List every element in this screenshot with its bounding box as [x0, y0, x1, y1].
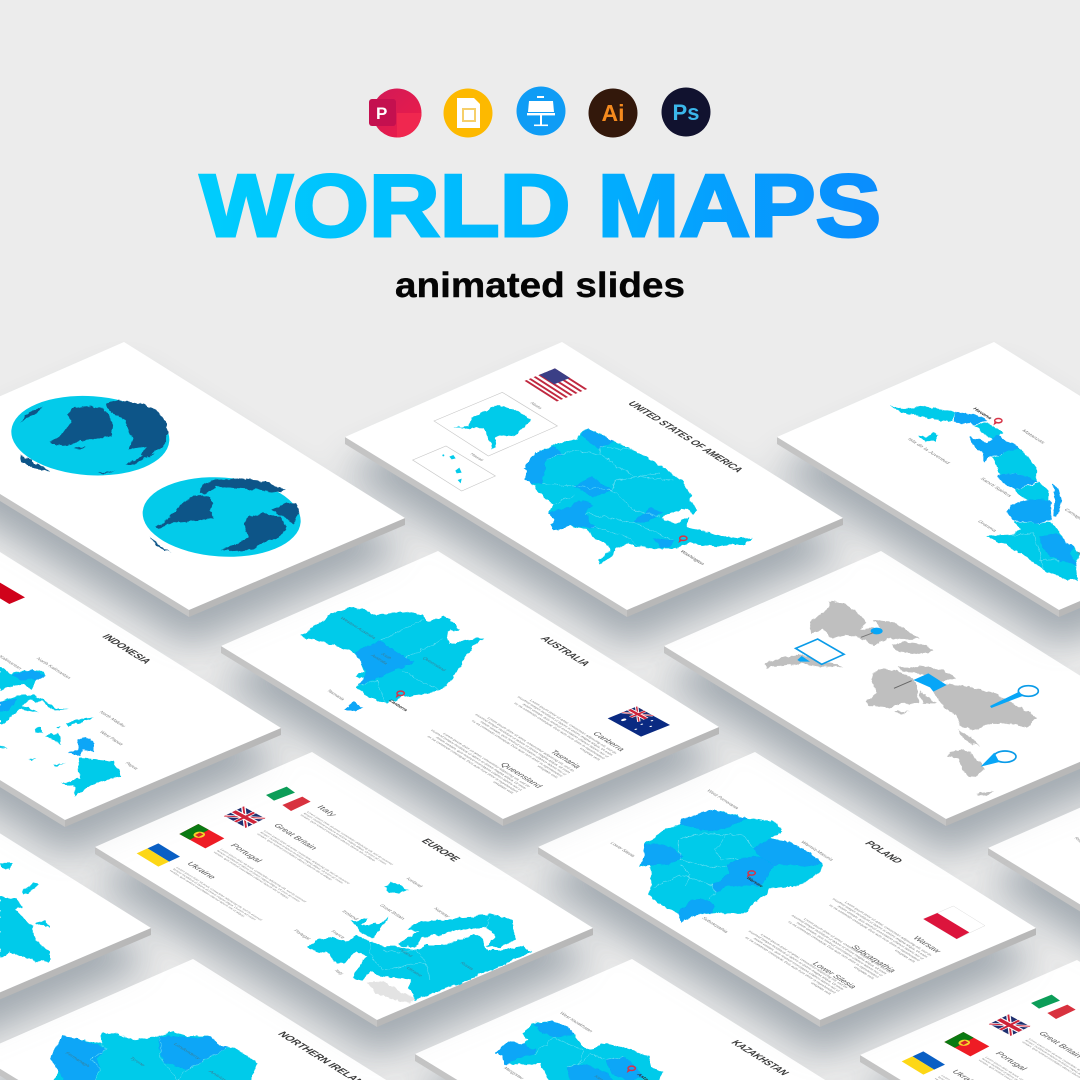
- country descriptions: Lorem ipsum dolor sit amet, consectetur adipiscing elit, sed do eiusmod: [262, 830, 351, 885]
- map pin: [627, 1066, 635, 1073]
- Indonesia labels: North Maluku: [97, 710, 127, 728]
- Australia labels: Queensland: [498, 761, 546, 789]
- Poland labels: [608, 789, 945, 990]
- slide: far right partial: [988, 753, 1080, 1028]
- Europe map labels: France: [329, 930, 346, 940]
- USA map: [523, 428, 753, 564]
- description paragraphs: ex ea commodo consequat. Duis aute irure dolor in reprehenderit: [744, 936, 837, 994]
- slide: Cuba: [777, 342, 1080, 617]
- Northern Ireland map: [50, 1032, 258, 1080]
- map pin: [678, 536, 687, 543]
- description paragraphs: ex ea commodo consequat. Duis aute irure dolor in reprehenderit: [828, 904, 921, 962]
- inset: Alaska: Alaska: [529, 401, 544, 410]
- Indonesia labels: Papua: [123, 761, 140, 771]
- Australia map: [300, 607, 483, 711]
- description paragraphs: minim veniam, quis nostrud exercitation ullamco laboris nisi ut: [479, 721, 567, 776]
- icon: PowerPoint: [369, 88, 422, 138]
- Indonesia map: [0, 667, 122, 796]
- slide drop shadows: [0, 376, 1080, 1080]
- Australia labels: Canberra: [386, 699, 409, 712]
- Europe map labels: Iceland: [404, 877, 424, 888]
- Indonesia title: INDONESIA: [99, 633, 154, 665]
- Australia labels: Queensland: [421, 656, 448, 672]
- description paragraphs: minim veniam, quis nostrud exercitation ullamco laboris nisi ut: [435, 736, 523, 791]
- description paragraphs: Lorem ipsum dolor sit amet, consectetur adipiscing elit, sed do: [528, 699, 618, 754]
- map pin: [747, 871, 755, 878]
- Poland labels: Lower Silesia: [608, 841, 636, 858]
- description paragraphs: ex ea commodo consequat. Duis aute irure dolor in reprehenderit: [513, 702, 606, 760]
- description paragraphs: minim veniam, quis nostrud exercitation ullamco laboris nisi ut: [752, 937, 841, 992]
- Poland labels: Warsaw: [911, 935, 945, 954]
- Cuba labels: Isla de la Juventud: [905, 437, 951, 465]
- title: WORLD MAPS: [200, 156, 881, 255]
- Europe map: [307, 882, 532, 1003]
- map pin: [396, 691, 404, 698]
- Indonesia labels: North Kalimantan: [34, 657, 72, 680]
- callout: blue ellipse marker: [861, 628, 883, 637]
- description paragraphs: Lorem ipsum dolor sit amet, consectetur adipiscing elit, sed do: [759, 934, 849, 989]
- icon: Google Slides: [444, 88, 492, 138]
- description paragraphs: eiusmod tempor incididunt ut labore et dolore magna aliqua. Ut enim: [831, 898, 929, 958]
- description paragraphs: [418, 694, 618, 795]
- callout: pin over Asia: [990, 686, 1038, 708]
- description paragraphs: Lorem ipsum dolor sit amet, consectetur adipiscing elit, sed do: [486, 717, 575, 772]
- Europe title: EUROPE: [418, 837, 463, 863]
- Australia labels: South: [380, 652, 393, 660]
- flag: Italy: [266, 787, 311, 811]
- Poland title: POLAND: [862, 840, 905, 865]
- Northern Ireland labels: Fermanagh: [64, 1051, 92, 1068]
- slide: Kazakhstan: [415, 959, 913, 1080]
- Australia labels: [325, 616, 628, 789]
- callout: blue flag marker: [894, 673, 947, 692]
- description paragraphs: voluptate velit.: [852, 966, 876, 980]
- world map land masses: [765, 602, 1037, 796]
- globe: western hemisphere: [110, 461, 333, 573]
- description paragraphs: ex ea commodo consequat. Duis aute irure dolor in reprehenderit: [787, 921, 880, 978]
- flag: Great Britain: [224, 807, 265, 828]
- country descriptions: veniam, quis nostrud exercitation ullamco laboris nisi ut aliquip.: [299, 814, 377, 862]
- description paragraphs: eiusmod tempor incididunt ut labore et dolore magna aliqua. Ut enim: [790, 914, 888, 975]
- callout: outlined rectangle: [796, 639, 844, 664]
- Kazakhstan labels: [501, 1011, 655, 1080]
- description paragraphs: eiusmod tempor incididunt ut labore et dolore magna aliqua. Ut enim: [430, 729, 527, 789]
- country labels: Great Britain: [271, 822, 321, 851]
- globe: eastern hemisphere: [0, 380, 202, 491]
- country labels: Ukraine: [185, 860, 219, 880]
- Poland labels: Warsaw: [744, 876, 764, 888]
- country descriptions: Lorem ipsum dolor sit amet, consectetur adipiscing elit, sed do eiusmod: [175, 866, 264, 921]
- country labels: Portugal: [228, 842, 265, 864]
- flag: Poland: [923, 906, 985, 939]
- flag: Australia: [608, 707, 670, 737]
- inset: Hawaii: Hawaii: [469, 452, 485, 461]
- faint shadows from row three onto row four: [0, 786, 1080, 1054]
- Indonesia labels: [0, 655, 140, 771]
- description paragraphs: eiusmod tempor incididunt ut labore et dolore magna aliqua. Ut enim: [747, 930, 845, 990]
- country labels: Italy: [315, 804, 340, 818]
- icon: Illustrator: [588, 88, 638, 138]
- Poland labels: Subcarpathia: [849, 944, 899, 974]
- slide: Australia: [221, 551, 719, 826]
- Northern Ireland labels: Londonderry: [172, 1042, 202, 1060]
- Cuba map: [889, 405, 1080, 581]
- icon: Illustrator: Ai: [602, 100, 624, 126]
- country descriptions: tempor incididunt ut labore et dolore magna aliqua. Ut enim ad minim: [302, 812, 388, 865]
- country labels: Portugal: [993, 1050, 1030, 1072]
- Australia title: AUSTRALIA: [537, 635, 593, 668]
- faint shadows from row two onto row three: [0, 585, 1080, 854]
- description paragraphs: eiusmod tempor incididunt ut labore et dolore magna aliqua. Ut enim: [516, 696, 614, 756]
- Europe map labels: Ireland: [340, 910, 360, 921]
- flag: Great Britain: [989, 1015, 1030, 1036]
- Australia labels: Australia: [370, 654, 389, 665]
- partial map shapes: [0, 863, 50, 963]
- description paragraphs: voluptate velit.: [809, 982, 833, 996]
- flag: Indonesia: [0, 583, 25, 604]
- slide: Europe: [95, 752, 593, 1027]
- callout: pin over Australia: [981, 751, 1016, 767]
- slide: Europe (copy, bottom right): [860, 960, 1080, 1080]
- flag: Italy: [1031, 995, 1076, 1019]
- Kazakhstan map: [495, 1021, 663, 1080]
- flag: Ukraine: [902, 1051, 945, 1075]
- Australia labels: Tasmania: [548, 749, 584, 770]
- label: Washington: Washington: [678, 550, 706, 566]
- Cuba labels: [905, 407, 1080, 563]
- subtitle: animated slides: [395, 266, 685, 305]
- Northern Ireland labels: [64, 1042, 228, 1080]
- Europe map labels: [291, 877, 475, 977]
- Cuba labels: Matanzas: [1020, 429, 1047, 445]
- icon: Keynote: [516, 86, 566, 136]
- Europe map labels: Ukraine: [405, 966, 424, 977]
- description paragraphs: voluptate velit.: [536, 765, 560, 779]
- Northern Ireland labels: Tyrone: [128, 1056, 147, 1067]
- description paragraphs: Lorem ipsum dolor sit amet, consectetur adipiscing elit, sed do: [802, 918, 892, 973]
- Cuba labels: Granma: [975, 520, 998, 533]
- slide: United States of America: [345, 342, 843, 617]
- Australia labels: Western Australia: [339, 616, 378, 640]
- Poland labels: Lower Silesia: [810, 960, 860, 990]
- flag: Ukraine: [137, 843, 180, 867]
- country descriptions: veniam, quis nostrud exercitation ullamco laboris nisi ut aliquip.: [256, 833, 334, 881]
- country descriptions: [168, 811, 394, 924]
- description paragraphs: minim veniam, quis nostrud exercitation ullamco laboris nisi ut: [836, 905, 925, 960]
- description paragraphs: Lorem ipsum dolor sit amet, consectetur adipiscing elit, sed do: [843, 901, 933, 956]
- Indonesia labels: West Papua: [97, 730, 125, 746]
- description paragraphs: Lorem ipsum dolor sit amet, consectetur adipiscing elit, sed do: [442, 733, 531, 788]
- country labels: [185, 804, 340, 880]
- country descriptions: tempor incididunt ut labore et dolore magna aliqua. Ut enim ad minim: [216, 850, 301, 903]
- Poland map: [638, 809, 823, 922]
- Northern Ireland labels: Antrim: [207, 1070, 228, 1080]
- Europe map labels: Russia: [459, 961, 475, 971]
- slide: Indonesia: [0, 552, 281, 827]
- inset: Alaska: [434, 392, 557, 456]
- country descriptions: veniam, quis nostrud exercitation ullamco laboris nisi ut aliquip.: [212, 851, 291, 899]
- Australia labels: Canberra: [590, 730, 628, 752]
- slide: partial map, lower left: [0, 752, 151, 1027]
- faint shadows from row one onto row two: [0, 376, 1080, 644]
- description paragraphs: minim veniam, quis nostrud exercitation ullamco laboris nisi ut: [795, 922, 884, 977]
- map pin: [993, 418, 1002, 425]
- description paragraphs: voluptate velit.: [492, 781, 515, 795]
- flag: Portugal: [179, 824, 224, 848]
- Cuba labels: Havana: [971, 407, 993, 420]
- description paragraphs: minim veniam, quis nostrud exercitation ullamco laboris nisi ut: [521, 703, 610, 758]
- Europe map labels: Norway: [431, 907, 452, 919]
- icon: PowerPoint: P: [376, 104, 387, 123]
- description paragraphs: ex ea commodo consequat. Duis aute irure dolor in reprehenderit: [470, 720, 564, 777]
- slide: globes: [0, 342, 405, 617]
- description paragraphs: [735, 896, 933, 996]
- country descriptions: tempor incididunt ut labore et dolore magna aliqua. Ut enim ad minim: [259, 831, 345, 884]
- USA title: UNITED STATES OF AMERICA: [625, 400, 746, 474]
- app icons row: [369, 86, 710, 138]
- Poland labels: West Pomerania: [705, 789, 740, 810]
- Europe map labels: Italy: [332, 969, 345, 976]
- inset: Hawaii: [413, 446, 495, 491]
- slide: Northern Ireland: [0, 959, 474, 1080]
- Europe map labels: Portugal: [291, 929, 312, 941]
- icon: Photoshop: Ps: [673, 100, 699, 125]
- Europe map labels: Poland: [397, 948, 414, 958]
- description paragraphs: eiusmod tempor incididunt ut labore et dolore magna aliqua. Ut enim: [474, 713, 571, 774]
- description paragraphs: voluptate velit.: [893, 949, 917, 963]
- icon: Photoshop: [662, 88, 710, 136]
- flag: Portugal: [944, 1032, 989, 1056]
- country descriptions: veniam, quis nostrud exercitation ullamco laboris nisi ut aliquip.: [168, 869, 247, 918]
- Poland labels: Warmia-Masuria: [799, 840, 835, 862]
- description paragraphs: ex ea commodo consequat. Duis aute irure dolor in reprehenderit: [426, 735, 519, 793]
- country labels: [950, 1012, 1080, 1080]
- Kazakhstan labels: West Kazakhstan: [557, 1011, 594, 1033]
- Cuba labels: Sancti Spiritus: [978, 477, 1013, 498]
- flag: USA: [525, 368, 587, 401]
- slide: Poland: [538, 752, 1036, 1027]
- Poland labels: Subcarpathia: [700, 916, 730, 934]
- Europe map labels: Great Britain: [377, 904, 406, 921]
- country descriptions: [933, 1038, 1080, 1080]
- country descriptions: tempor incididunt ut labore et dolore magna aliqua. Ut enim ad minim: [172, 868, 257, 921]
- country descriptions: Lorem ipsum dolor sit amet, consectetur adipiscing elit, sed do eiusmod: [306, 811, 394, 866]
- description paragraphs: voluptate velit.: [578, 747, 602, 761]
- slide: grey world map: [664, 551, 1080, 826]
- Australia labels: Tasmania: [325, 689, 346, 701]
- country descriptions: Lorem ipsum dolor sit amet, consectetur adipiscing elit, sed do eiusmod: [219, 848, 308, 903]
